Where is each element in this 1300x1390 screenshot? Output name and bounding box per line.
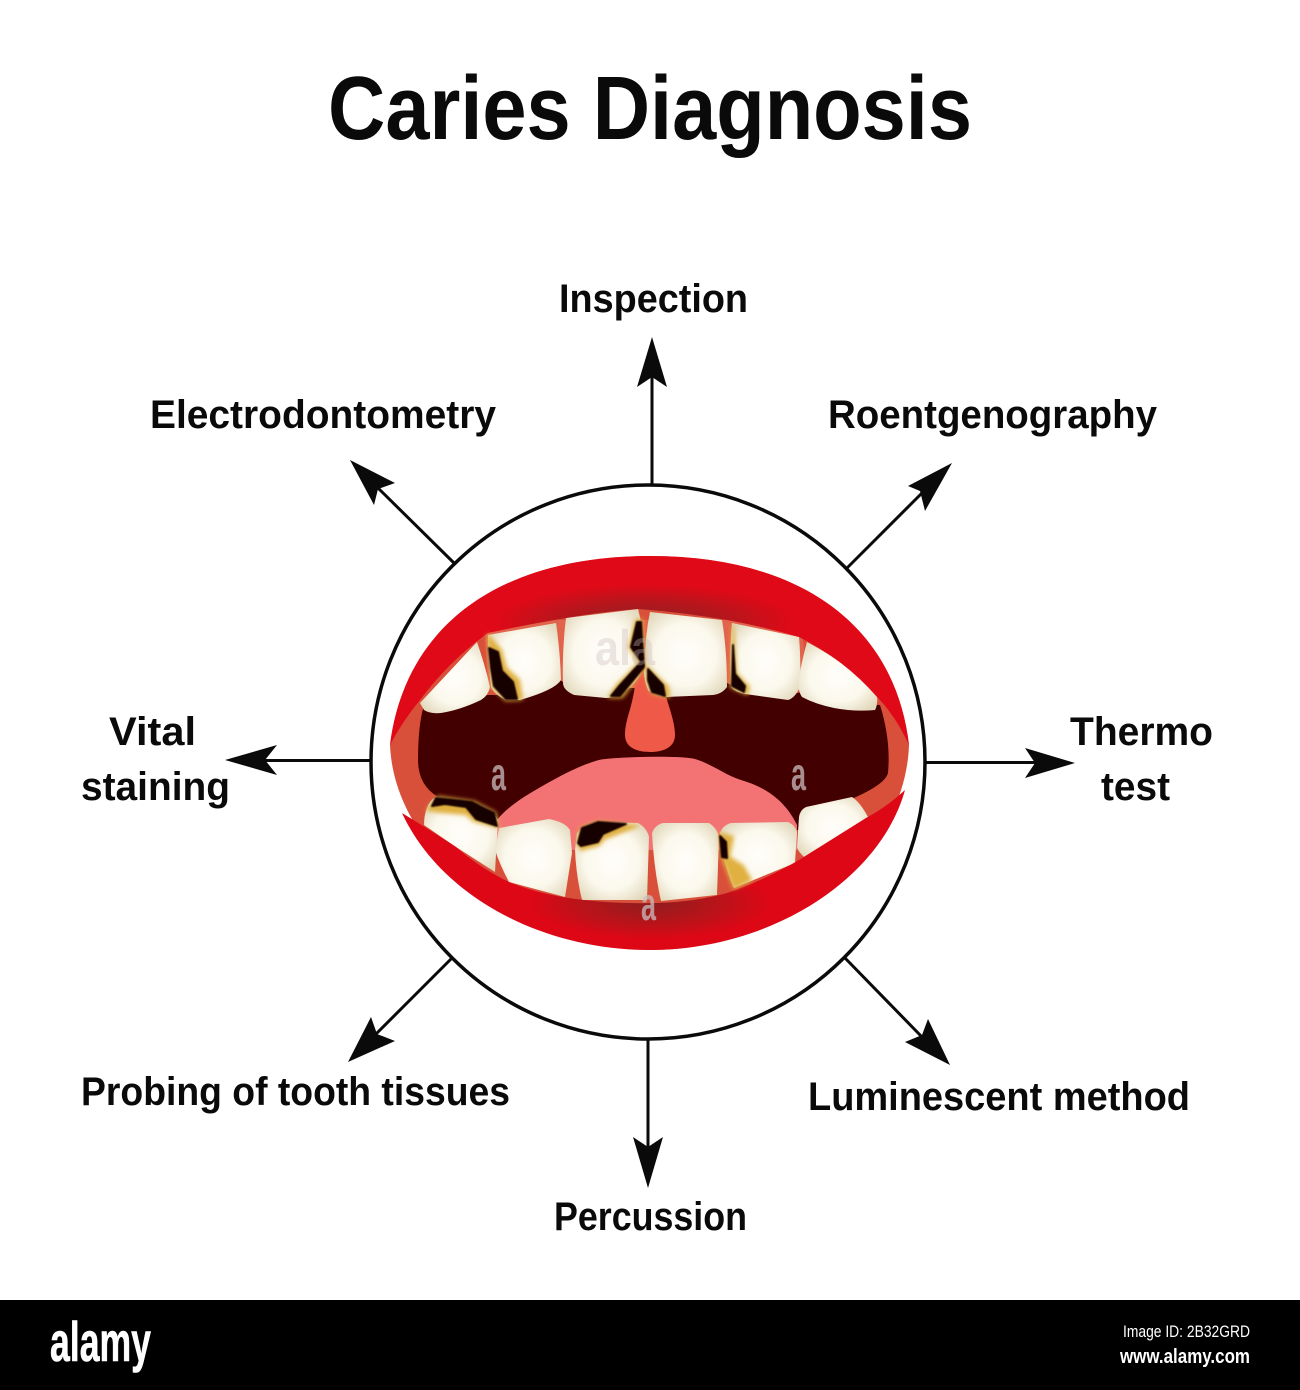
footer logo: alamy: [50, 1310, 151, 1373]
label: Vital staining: [81, 710, 230, 809]
upper tooth 1: [420, 642, 490, 713]
upper tooth 5: [730, 623, 800, 700]
label: Percussion: Percussion: [554, 1195, 747, 1239]
watermark letters in mouth: [491, 748, 806, 930]
label: Thermo test: [1070, 710, 1213, 809]
label: Inspection: Inspection: [559, 277, 748, 321]
label: Vital staining: Vital: [109, 710, 196, 754]
arrow: to Luminescent method: [845, 958, 950, 1065]
upper tooth 3: [563, 609, 645, 698]
arrow: up to Inspection: [637, 337, 667, 486]
lesion halos: [427, 620, 751, 888]
label: Roentgenography: Roentgenography: [828, 393, 1158, 437]
arrow: left to Vital staining: [225, 745, 371, 775]
watermark letters in mouth: a: [641, 878, 656, 930]
dark oral cavity: [418, 680, 889, 830]
lower tooth 4: [652, 823, 719, 901]
uvula: [625, 625, 675, 752]
label: Thermo test: test: [1101, 765, 1170, 809]
title: Caries Diagnosis: [328, 59, 972, 159]
watermark on upper teeth: ala: [595, 620, 656, 676]
illustration: open mouth with decayed teeth: [390, 556, 909, 950]
lower tooth 3: [575, 822, 649, 900]
footer bar: [0, 1300, 1300, 1390]
arrow: to Electrodontometry: [350, 460, 454, 563]
arrow: to Probing of tooth tissues: [348, 958, 452, 1062]
arrow: right to Thermo test: [925, 748, 1075, 778]
upper tooth 6: [798, 642, 877, 711]
mouth interior base: [390, 556, 909, 950]
label: Thermo test: Thermo: [1070, 710, 1213, 754]
lower lip: [402, 790, 905, 950]
lower tooth 2: [495, 819, 572, 897]
watermark letters in mouth: a: [791, 748, 806, 800]
upper lip: [390, 556, 909, 745]
label: Luminescent method: Luminescent method: [808, 1075, 1190, 1119]
footer url: www.alamy.com: [1119, 1346, 1250, 1368]
label: Electrodontometry: Electrodontometry: [150, 393, 497, 437]
upper tooth 4: [644, 612, 727, 697]
arrow: down to Percussion: [633, 1040, 663, 1188]
lesion cores: [432, 622, 745, 858]
tongue: [497, 757, 797, 850]
upper tooth 2: [488, 623, 561, 700]
caries lesions: [427, 620, 751, 888]
footer image id: Image ID: 2B32GRD: [1123, 1322, 1250, 1341]
lower teeth: [424, 797, 868, 901]
circle outline around mouth: [371, 485, 925, 1039]
lower tooth 6: [797, 797, 868, 857]
label: Vital staining: staining: [81, 765, 230, 809]
lower tooth 1: [424, 797, 498, 872]
label: Probing of tooth tissues: Probing of tooth tissues: [81, 1070, 510, 1114]
watermark letters in mouth: a: [491, 748, 506, 800]
upper teeth: [420, 609, 877, 713]
arrow: to Roentgenography: [847, 463, 952, 568]
lower tooth 5: [720, 822, 797, 888]
coral gum behind upper teeth: [485, 620, 810, 690]
